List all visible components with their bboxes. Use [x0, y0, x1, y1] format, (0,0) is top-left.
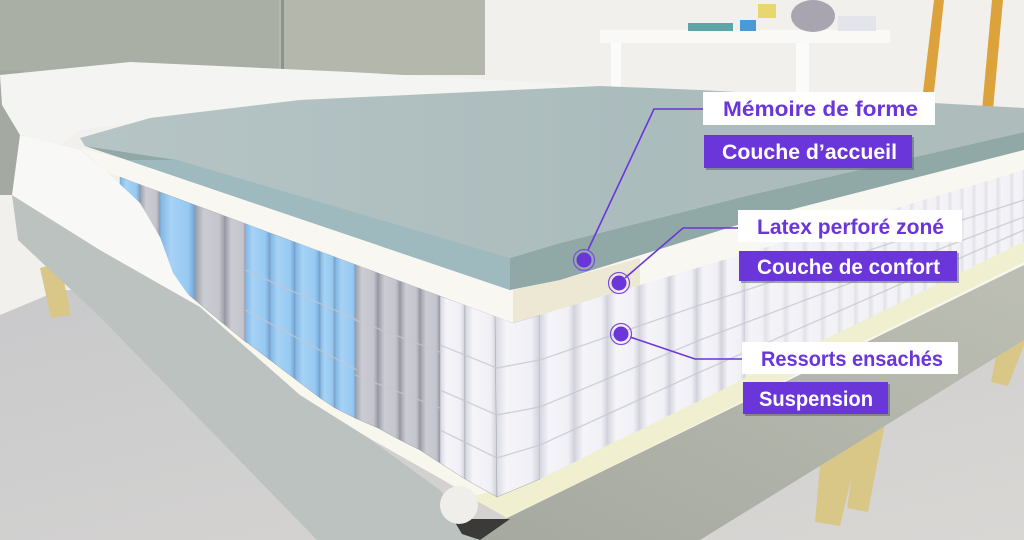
label: Couche de confort — [739, 251, 959, 283]
label: Mémoire de forme: Mémoire de forme — [723, 98, 918, 121]
callout line: memory foam — [588, 109, 703, 250]
memory foam top surface — [80, 86, 1024, 258]
bed base, left side — [12, 195, 477, 540]
label: Mémoire de forme — [703, 92, 935, 125]
marker: memory foam — [574, 250, 594, 270]
bed base, right side — [480, 262, 1024, 540]
orange poles — [923, 0, 1003, 110]
spring columns: left cut section — [120, 177, 540, 497]
callout line: latex — [625, 228, 738, 278]
spring columns: right section — [540, 170, 1024, 479]
bed legs — [40, 262, 1024, 526]
side table — [600, 0, 890, 113]
far springs haze — [745, 170, 1024, 378]
callout line: springs — [630, 337, 742, 359]
label: Latex perforé zoné: Latex perforé zoné — [757, 216, 944, 239]
latex comfort layer — [80, 148, 1024, 323]
label: Latex perforé zoné — [738, 210, 962, 242]
floor — [0, 290, 1024, 540]
lower foam front edge — [470, 238, 1024, 518]
spring pocket seams — [245, 200, 1024, 458]
label: Ressorts ensachés — [742, 342, 958, 374]
label: Suspension: Suspension — [759, 388, 873, 411]
label: Couche d'accueil — [704, 135, 914, 170]
marker: springs — [610, 324, 632, 344]
lower foam layer — [187, 238, 1024, 518]
white duvet — [0, 62, 600, 145]
rolled cover at bottom — [440, 486, 510, 540]
latex front corner — [513, 258, 640, 323]
label: Couche de confort: Couche de confort — [757, 256, 940, 279]
label: Couche d'accueil: Couche d’accueil — [722, 141, 897, 164]
memory foam side — [85, 132, 1024, 290]
label: Suspension — [743, 382, 890, 416]
label: Ressorts ensachés: Ressorts ensachés — [761, 348, 943, 371]
memory foam left side highlight — [127, 160, 510, 290]
mattress cover, left side — [12, 135, 200, 307]
marker: latex — [608, 272, 630, 294]
headboard — [0, 0, 485, 195]
